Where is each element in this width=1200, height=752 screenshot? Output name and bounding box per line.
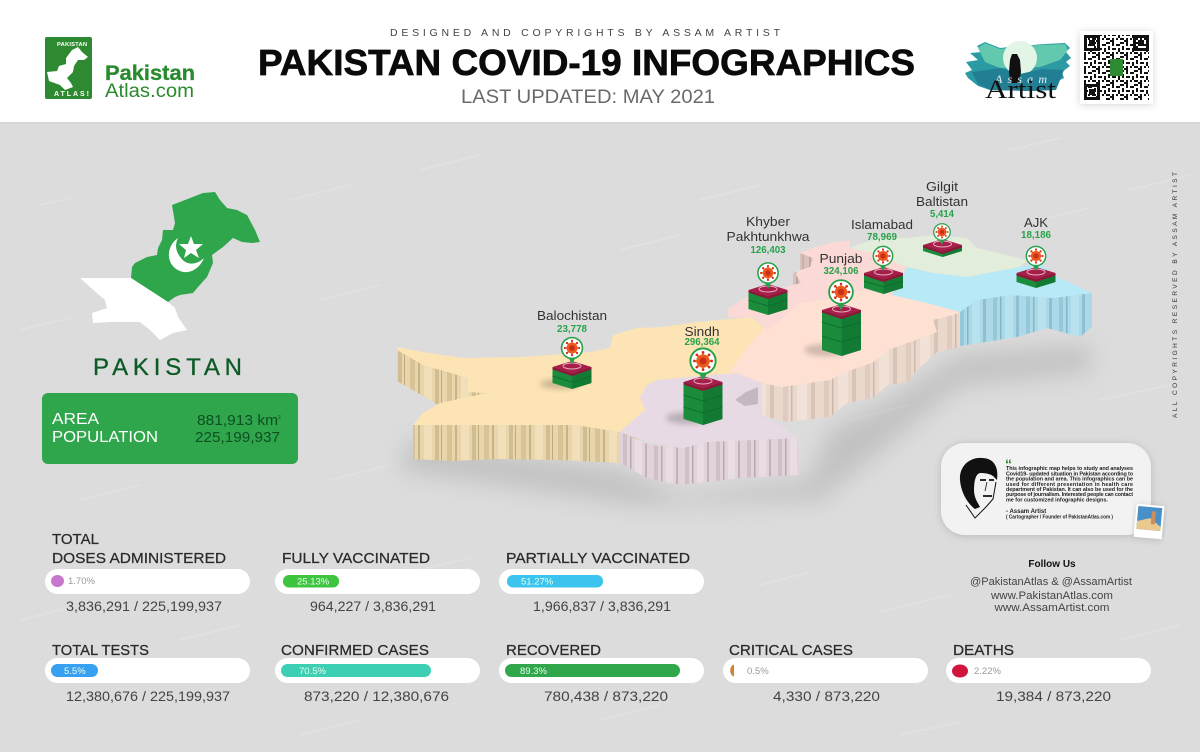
logo: Pakistan Atlas: PAKISTAN — [57, 42, 87, 48]
follow us block: Follow Us — [1028, 559, 1076, 570]
QR code — [1080, 31, 1153, 104]
crescent and star — [169, 236, 204, 272]
marker: Gilgit Baltistan: Baltistan — [916, 195, 968, 209]
stat: partially vaccinated: 51.27% — [521, 576, 554, 588]
stat: critical cases: 0.5% — [747, 666, 769, 677]
stat: confirmed cases: CONFIRMED CASES — [281, 642, 429, 659]
area and population panel: 881,913 km — [197, 413, 278, 429]
marker: Balochistan — [537, 309, 607, 389]
quote mark: “ — [1005, 456, 1012, 472]
logo: Pakistan Atlas: Atlas.com — [105, 81, 194, 102]
marker: Sindh: Sindh — [684, 325, 720, 339]
marker: Khyber Pakhtunkhwa: Khyber — [746, 215, 790, 229]
stat: deaths: 2.22% — [974, 666, 1001, 677]
quote text: the population and area. This infographics can be — [1006, 477, 1133, 483]
marker: Sindh: 296,364 — [684, 337, 720, 348]
stat: total tests: 5.5% — [64, 666, 86, 677]
title: PAKISTAN COVID-19 INFOGRAPHICS — [258, 42, 915, 83]
country name: PAKISTAN — [93, 354, 242, 381]
area and population panel: 2 — [278, 415, 281, 421]
area and population panel: POPULATION — [52, 429, 158, 446]
logo: Pakistan Atlas: ATLAS! — [54, 91, 89, 98]
marker: Khyber Pakhtunkhwa: 126,403 — [750, 245, 786, 256]
province: Khyber Pakhtunkhwa — [728, 240, 907, 331]
stat: critical cases — [723, 642, 928, 704]
stat: total doses: 3,836,291 / 225,199,937 — [66, 598, 222, 614]
marker: Khyber Pakhtunkhwa — [726, 215, 810, 315]
marker: AJK: 18,186 — [1021, 230, 1051, 241]
logo: Pakistan Atlas — [45, 37, 195, 102]
marker: Gilgit Baltistan: 5,414 — [930, 209, 954, 220]
marker: AJK: AJK — [1024, 216, 1049, 230]
quote text: This infographic map helps to study and analyses — [1006, 466, 1133, 472]
marker: Balochistan: Balochistan — [537, 309, 607, 323]
map: 3D provinces — [397, 235, 1092, 505]
stat: recovered: 89.3% — [520, 666, 547, 677]
area and population panel: 225,199,937 — [195, 430, 280, 446]
header band — [0, 0, 1200, 124]
stat: fully vaccinated: 25.13% — [297, 576, 330, 588]
marker: Sindh — [666, 325, 722, 425]
marker: Khyber Pakhtunkhwa: Pakhtunkhwa — [726, 230, 810, 244]
quote text: used for different presentation in health care — [1006, 482, 1133, 488]
quote card — [941, 443, 1164, 539]
stat: critical cases: CRITICAL CASES — [729, 642, 853, 659]
stat: confirmed cases — [275, 642, 480, 704]
map: Pakistan flag silhouette — [80, 192, 260, 340]
stat: partially vaccinated: 1,966,837 / 3,836,291 — [533, 598, 671, 614]
photo — [1134, 504, 1164, 539]
stat: confirmed cases: 873,220 / 12,380,676 — [304, 688, 449, 704]
area and population panel: AREA — [52, 411, 99, 428]
logo: Pakistan Atlas: Pakistan — [105, 62, 195, 85]
province: Balochistan — [397, 317, 765, 432]
stat: total doses: 1.70% — [68, 576, 95, 587]
stat: partially vaccinated — [499, 550, 704, 614]
marker: Islamabad: Islamabad — [851, 218, 913, 232]
province: Sindh — [620, 373, 798, 448]
quote text: purpose of journalism. Interested people can contact — [1006, 492, 1133, 498]
stat: deaths: DEATHS — [953, 642, 1014, 659]
marker: AJK — [1016, 216, 1056, 288]
follow us block: www.AssamArtist.com — [993, 602, 1110, 614]
stat: total doses: TOTAL — [52, 531, 99, 548]
stat: partially vaccinated: PARTIALLY VACCINATED — [506, 550, 690, 567]
stat: fully vaccinated — [275, 550, 480, 614]
credit line: DESIGNED AND COPYRIGHTS BY ASSAM ARTIST — [390, 27, 781, 39]
stat: deaths: 19,384 / 873,220 — [996, 688, 1111, 704]
stat: fully vaccinated: 964,227 / 3,836,291 — [310, 598, 436, 614]
province: AJK — [892, 263, 1092, 312]
stat: confirmed cases: 70.5% — [299, 666, 326, 677]
stat: recovered: RECOVERED — [506, 642, 601, 659]
walls — [397, 348, 487, 406]
follow us block: @PakistanAtlas & @AssamArtist — [970, 576, 1132, 588]
vertical copyright: ALL COPYRIGHTS RESERVED BY ASSAM ARTIST — [1172, 172, 1179, 418]
last updated: LAST UPDATED: MAY 2021 — [461, 87, 715, 108]
stat: total tests — [45, 642, 250, 704]
stat: critical cases: 4,330 / 873,220 — [773, 688, 880, 704]
marker: Gilgit Baltistan — [916, 180, 968, 257]
stat: recovered — [499, 642, 704, 704]
logo: Assam Artist: Artist — [985, 75, 1057, 104]
quote text — [1006, 466, 1134, 520]
marker: Balochistan: 23,778 — [557, 324, 587, 335]
logo: Assam Artist — [965, 41, 1071, 104]
stat: deaths — [946, 642, 1151, 704]
stat: recovered: 780,438 / 873,220 — [544, 688, 668, 704]
map shadow — [400, 345, 1090, 505]
marker: Gilgit Baltistan: Gilgit — [926, 180, 959, 194]
province: Gilgit Baltistan — [850, 235, 1027, 277]
stat: total doses: DOSES ADMINISTERED — [52, 550, 226, 567]
marker: Islamabad: 78,969 — [867, 232, 897, 243]
portrait — [960, 458, 997, 518]
logo: Assam Artist: Assam — [994, 72, 1047, 86]
marker: Punjab: 324,106 — [824, 266, 859, 277]
marker: Punjab — [804, 252, 863, 356]
follow us block — [970, 559, 1132, 614]
province: Punjab — [730, 290, 960, 387]
follow us block: www.PakistanAtlas.com — [990, 590, 1113, 602]
stat: total tests: TOTAL TESTS — [52, 642, 149, 659]
stat: total doses — [45, 531, 250, 614]
marker: Islamabad — [851, 218, 913, 294]
quote text: Covid19- updated situation in Pakistan according to — [1006, 471, 1134, 477]
quote text: department of Pakistan. It can also be used for the — [1006, 487, 1133, 493]
marker: Punjab: Punjab — [820, 252, 863, 266]
stat: total tests: 12,380,676 / 225,199,937 — [66, 688, 230, 704]
stat: fully vaccinated: FULLY VACCINATED — [282, 550, 430, 567]
quote text: ( Cartographer / Founder of PakistanAtlas.com ) — [1006, 514, 1113, 520]
area and population panel — [42, 393, 298, 464]
quote text: - Assam Artist — [1006, 509, 1046, 515]
quote text: me for customized infographic designs. — [1006, 498, 1108, 504]
